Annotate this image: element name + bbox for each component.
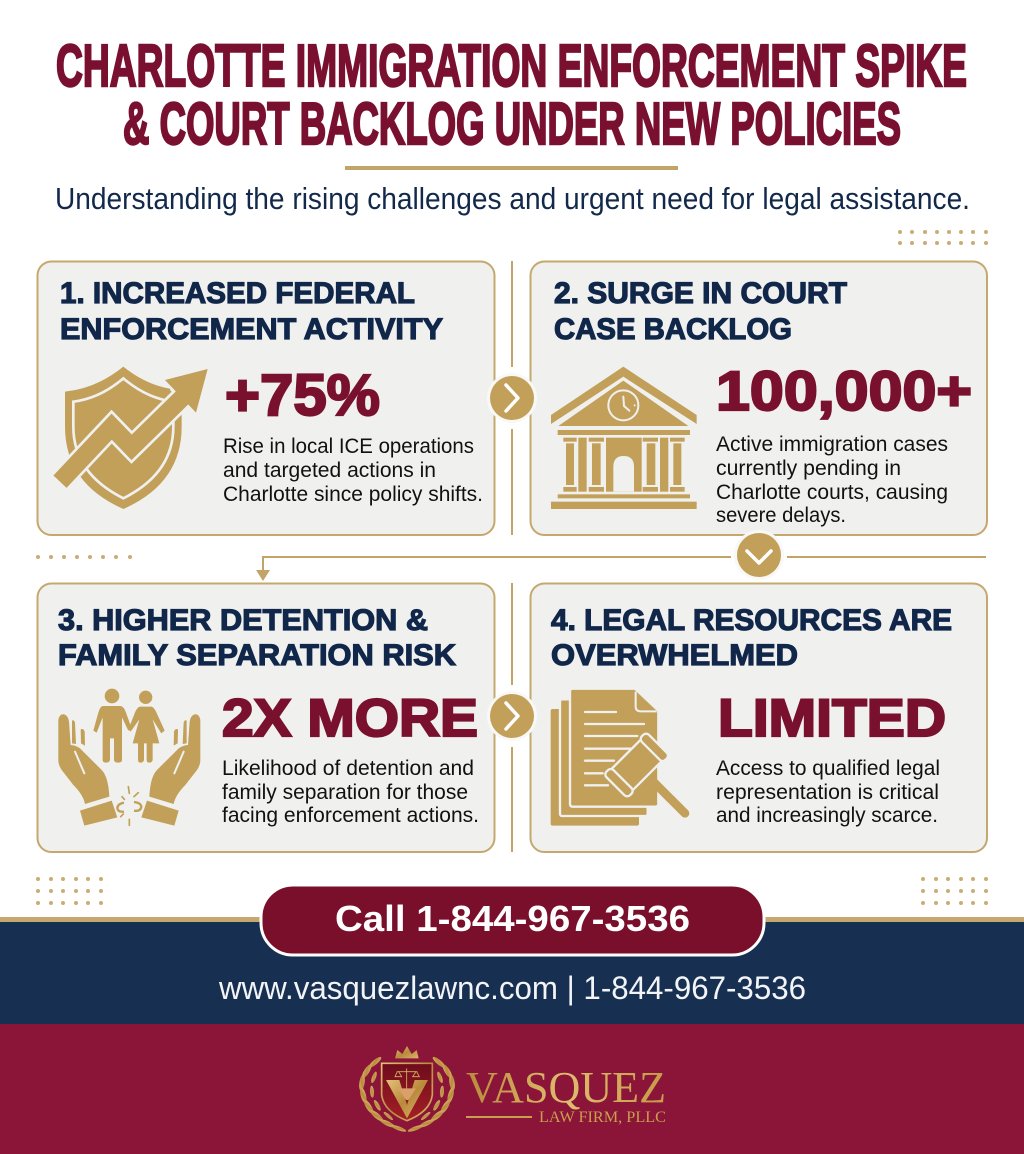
panel 1 heading <box>60 277 443 346</box>
arrow button: panel 3 to 4 <box>487 691 537 741</box>
dots: lower right <box>921 877 988 905</box>
icon: hands holding family <box>58 689 200 826</box>
panel 1 heading: 1. INCREASED FEDERAL <box>60 277 415 310</box>
panel 3 heading <box>58 604 456 672</box>
contact line: www.vasquezlawnc.com | 1-844-967-3536 <box>218 970 806 1006</box>
stat: LIMITED: LIMITED <box>718 689 946 748</box>
dots: top right <box>898 230 988 245</box>
panel 2 description: Active immigration cases <box>716 433 948 456</box>
panel 4: legal resources <box>530 584 987 852</box>
panel 1 heading: ENFORCEMENT ACTIVITY <box>60 313 443 346</box>
panel 3 description <box>222 757 479 827</box>
icon: shield with rising arrow <box>60 360 217 509</box>
panel 2: court backlog <box>530 262 987 535</box>
vertical connectors <box>511 261 513 852</box>
connector dots row <box>36 555 132 559</box>
panel 2 description: currently pending in <box>716 457 901 480</box>
stat: +75%: +75% <box>225 363 380 428</box>
panel 4 description: and increasingly scarce. <box>716 804 938 827</box>
icon: documents and gavel <box>551 689 709 838</box>
panel 2 heading: CASE BACKLOG <box>554 313 792 346</box>
panel 2 description <box>716 433 948 527</box>
panel 3 heading: FAMILY SEPARATION RISK <box>58 639 456 672</box>
logo: Vasquez Law Firm: LAW FIRM, PLLC <box>539 1109 666 1126</box>
panel 2 description: severe delays. <box>716 504 846 527</box>
arrow button: panel 1 to 2 <box>487 373 537 423</box>
logo crest <box>358 1046 456 1133</box>
panel 4 description: Access to qualified legal <box>716 757 940 780</box>
panel 2 heading <box>554 277 847 346</box>
dots: lower left <box>36 877 103 905</box>
panel 1 description <box>223 435 483 506</box>
panel 3: detention risk <box>38 584 494 852</box>
connector arrow: to panel 3 <box>256 557 986 581</box>
panel 3 description: facing enforcement actions. <box>222 804 479 827</box>
panel 3 heading: 3. HIGHER DETENTION & <box>58 604 428 637</box>
icon: courthouse with clock <box>551 367 697 509</box>
arrow button: panel 2 to 3 <box>734 530 784 580</box>
logo: Vasquez Law Firm <box>358 1046 666 1133</box>
stat: 100,000+: 100,000+ <box>716 359 972 422</box>
call button: Call 1-844-967-3536 <box>335 898 690 939</box>
call button <box>261 885 764 955</box>
title <box>56 33 967 157</box>
panel 1 description: and targeted actions in <box>223 459 436 482</box>
panel 4 heading: OVERWHELMED <box>551 639 798 672</box>
panel 4 heading <box>551 604 952 672</box>
panel 1: federal enforcement <box>38 262 494 535</box>
panel 4 heading: 4. LEGAL RESOURCES ARE <box>551 604 952 637</box>
footer band: logo background <box>0 1024 1024 1154</box>
panel 4 description <box>716 757 940 827</box>
logo wordmark: VASQUEZ <box>466 1063 666 1112</box>
panel 3 description: family separation for those <box>222 781 468 804</box>
stat: 2X MORE: 2X MORE <box>222 689 478 748</box>
panel 1 description: Rise in local ICE operations <box>223 435 474 458</box>
panel 4 description: representation is critical <box>716 781 939 804</box>
footer band: contact <box>0 917 1024 1024</box>
panel 2 description: Charlotte courts, causing <box>716 481 948 504</box>
panel 3 description: Likelihood of detention and <box>222 757 474 780</box>
panel 1 description: Charlotte since policy shifts. <box>223 483 483 506</box>
panel 2 heading: 2. SURGE IN COURT <box>554 277 847 310</box>
